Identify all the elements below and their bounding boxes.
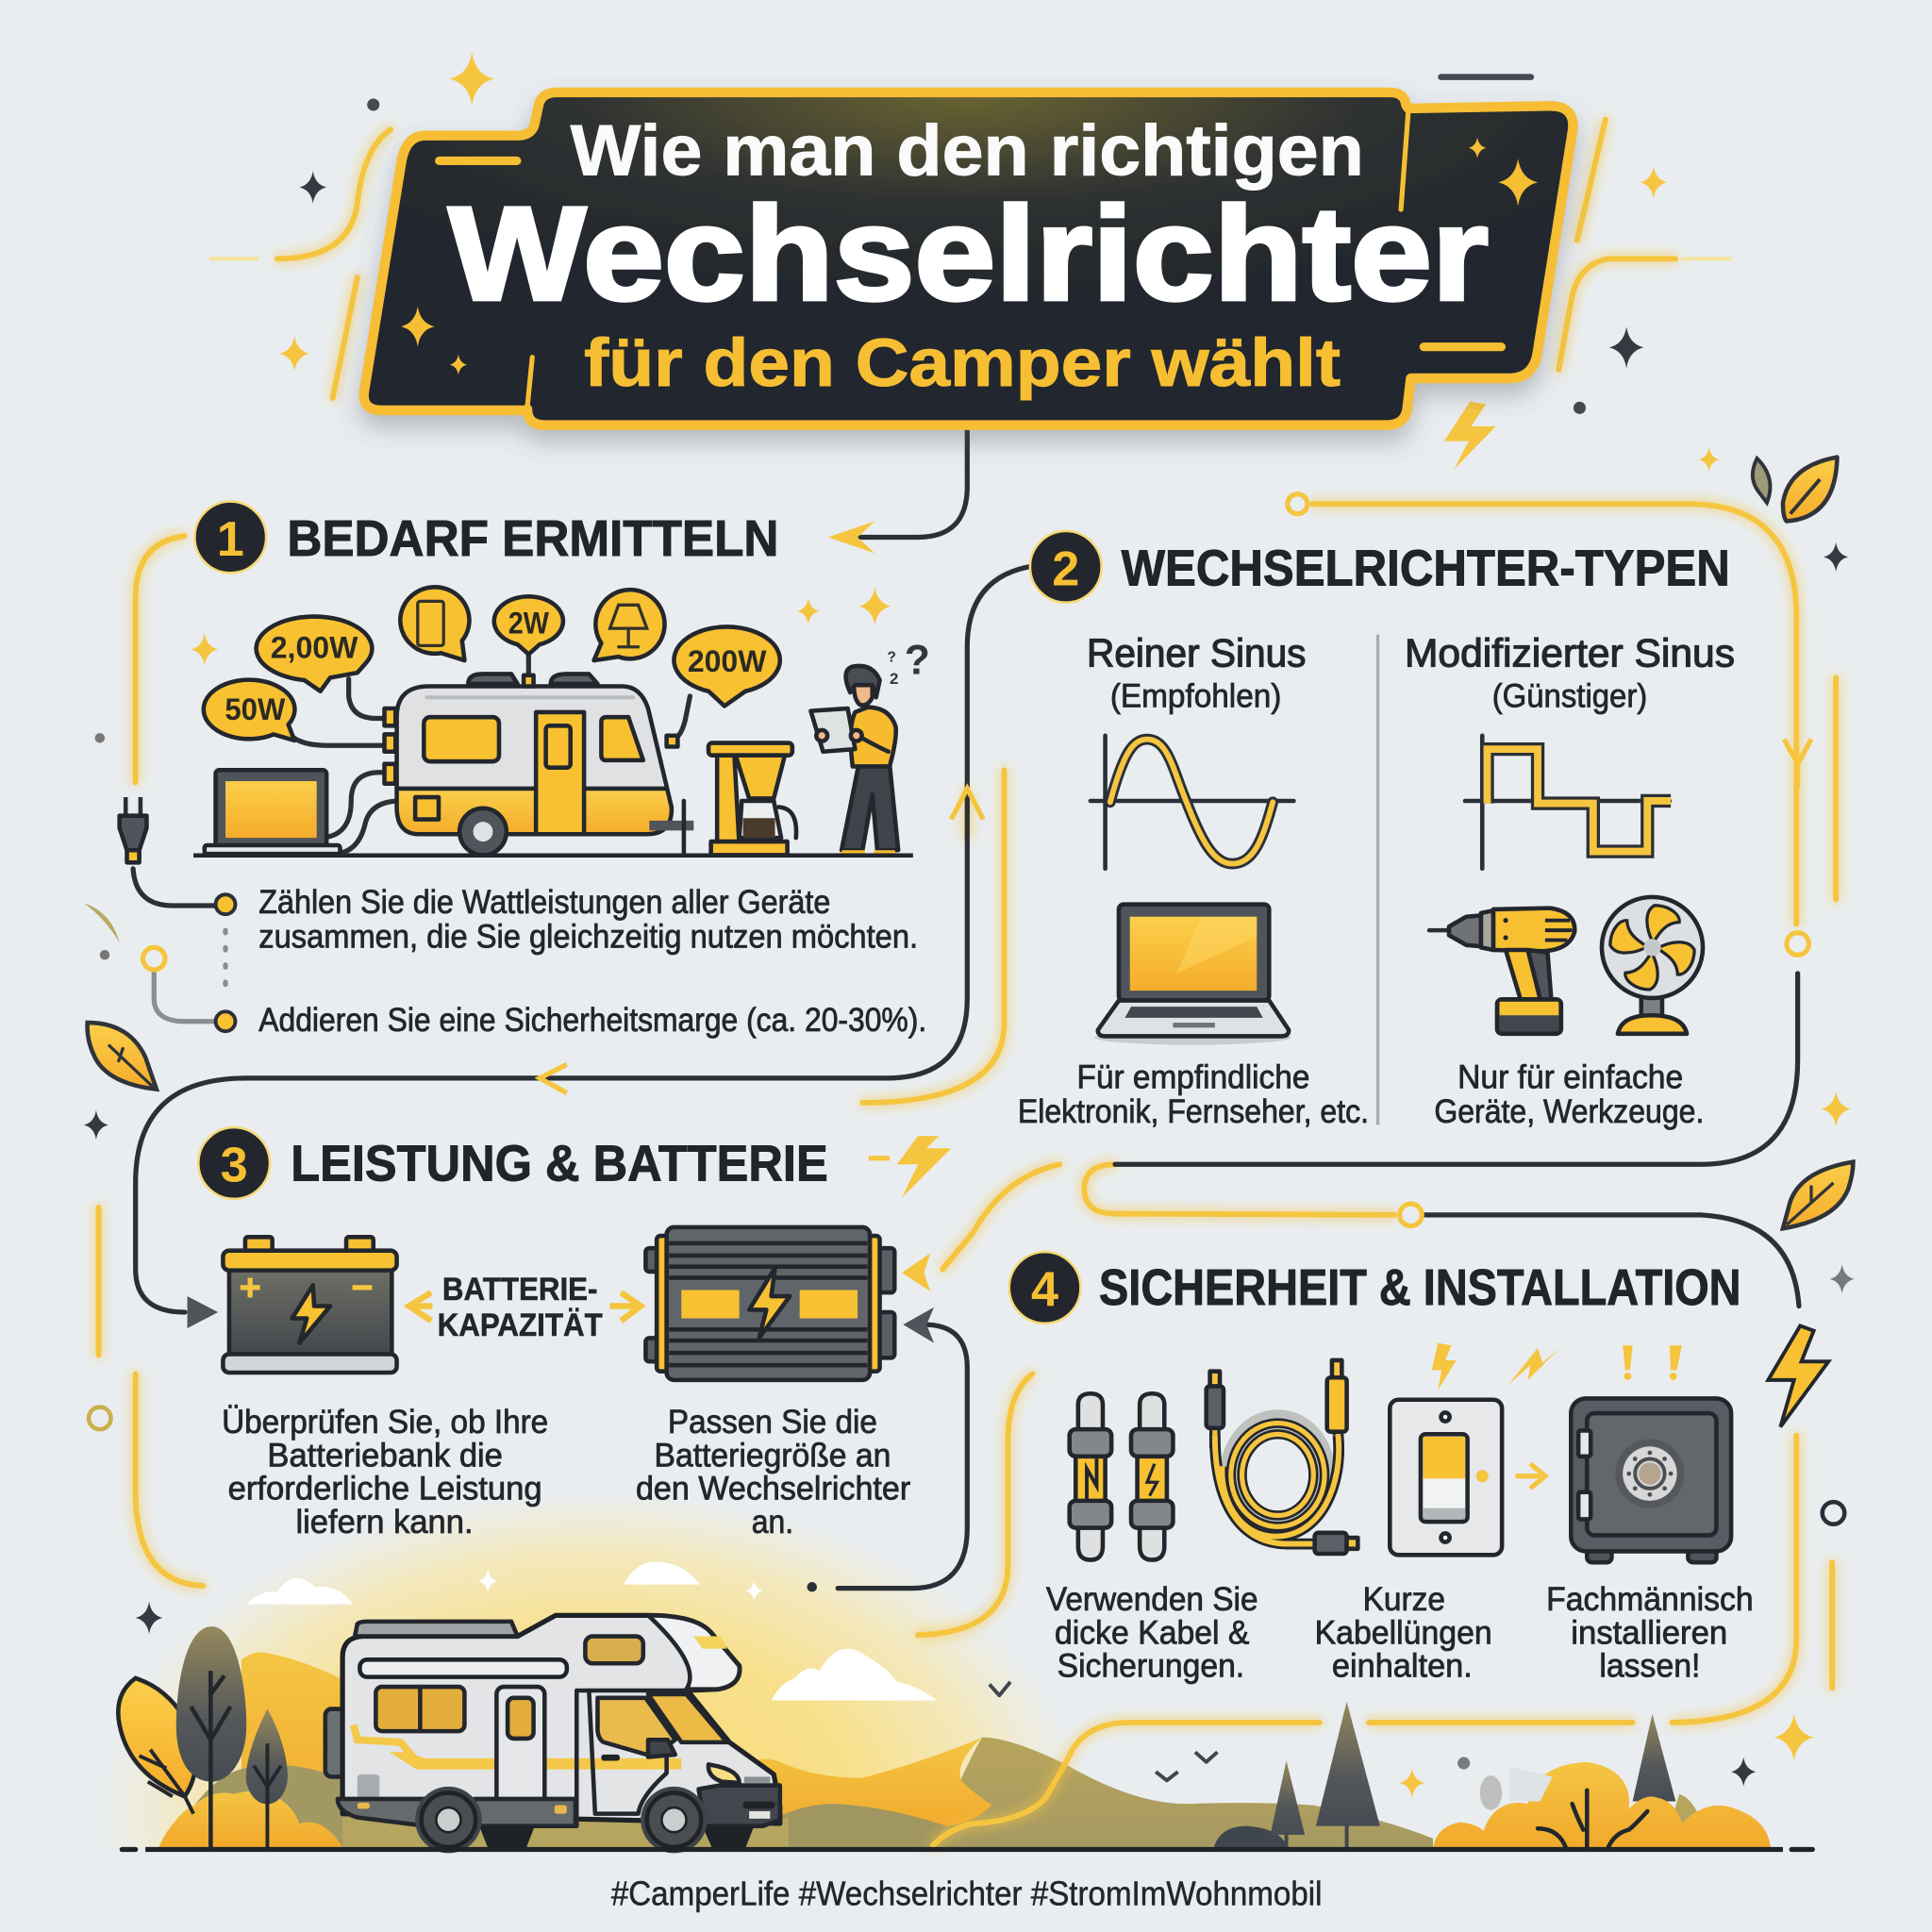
speech bubbles: 200W [688,643,767,678]
ground line [193,853,913,858]
number badge 2 [1030,531,1102,603]
text: battery check: Batteriebank die [267,1437,503,1474]
heading 1: BEDARF ERMITTELN [287,511,778,567]
ground line [120,1847,1815,1852]
text: short cables: Kurze [1363,1581,1445,1618]
caravan [385,674,693,855]
icon: laptop [1094,905,1291,1045]
number badge 2: 2 [1052,541,1079,596]
icon: fan [1602,897,1703,1034]
column: modified sine: Modifizierter Sinus [1405,631,1735,675]
text: battery check: liefern kann. [295,1504,474,1541]
icon: lightning bolts [869,402,1828,1426]
column: pure sine: Elektronik, Fernseher, etc. [1018,1093,1369,1130]
label: battery capacity [409,1272,641,1343]
column: modified sine: (Günstiger) [1492,678,1647,715]
column: pure sine [1018,631,1369,1130]
title banner [364,92,1573,425]
trees left [118,1626,288,1848]
icon: cable [1207,1360,1357,1554]
text: cables and fuses: Verwenden Sie [1046,1581,1258,1618]
motorhome [325,1615,780,1853]
text: professional install [1546,1581,1754,1685]
number badge 4: 4 [1031,1262,1058,1317]
title line 3: für den Camper wählt [584,325,1341,401]
bullet 2: Addieren Sie eine Sicherheitsmarge (ca. 20-30%). [258,1002,926,1039]
label: battery capacity: KAPAZITÄT [438,1307,603,1343]
column: modified sine [1405,631,1735,1130]
text: match battery: Batteriegröße an [655,1437,891,1474]
birds [990,1682,1217,1780]
icon: plug [120,797,146,862]
illustration: caravan and devices [193,587,930,858]
icon: safe [1571,1398,1731,1562]
number badge 3: 3 [221,1139,248,1193]
number badge 1 [194,502,266,573]
landscape backdrop: sky, clouds and hills [25,1478,1433,1848]
person with tablet [810,637,930,855]
connector lines dark [133,429,1799,1589]
text: cables and fuses [1046,1581,1258,1685]
text: cables and fuses: Sicherungen. [1058,1648,1244,1685]
arrow [1516,1464,1545,1489]
label: battery capacity: BATTERIE- [442,1272,597,1307]
text: professional install: Fachmännisch [1546,1581,1754,1618]
text: match battery [636,1404,910,1541]
number badge 3 [198,1127,270,1199]
heading 4: SICHERHEIT & INSTALLATION [1099,1260,1741,1316]
laptop small [205,770,340,854]
person with tablet: ? [887,649,896,665]
panel: section 4 [1009,1252,1754,1685]
hashtags: #CamperLife #Wechselrichter #StromImWohnmobil [611,1874,1322,1912]
icon: battery [223,1237,397,1373]
icon: leaves [88,458,1853,1228]
speech bubbles: 2,00W [271,629,358,664]
number badge 1: 1 [217,512,244,567]
text: cables and fuses: dicke Kabel & [1055,1614,1249,1651]
speech bubbles [204,587,780,741]
column: pure sine: (Empfohlen) [1110,678,1281,715]
number badge 4 [1009,1252,1080,1324]
icon: fuses [1070,1393,1173,1560]
text: battery check: Überprüfen Sie, ob Ihre [222,1404,548,1441]
panel: section 1 [120,502,930,1039]
chart: sine wave [1091,736,1293,869]
text: battery check: erforderliche Leistung [228,1471,542,1507]
title line 1: Wie man den richtigen [571,110,1364,191]
trees and bushes right [1214,1702,1771,1848]
column: pure sine: Für empfindliche [1077,1058,1309,1095]
text: short cables [1315,1581,1492,1685]
text: match battery: den Wechselrichter [636,1471,910,1507]
icon: inverter [645,1227,894,1380]
landscape foreground [118,1615,1815,1853]
person with tablet: ? [905,637,930,683]
icon: wall switch [1390,1400,1502,1555]
title decorations [401,111,1538,407]
cables [291,651,690,854]
text: professional install: lassen! [1599,1648,1700,1685]
text: short cables: Kabellüngen [1315,1614,1492,1651]
text: battery check [222,1404,548,1541]
panel: section 3 [198,1127,910,1541]
text: short cables: einhalten. [1332,1648,1473,1685]
person with tablet: 2 [890,670,898,688]
heading 3: LEISTUNG & BATTERIE [291,1136,828,1191]
speech bubbles: 2W [508,605,549,640]
column: pure sine: Reiner Sinus [1087,631,1306,675]
connector arrows and rings [89,494,1844,1592]
bullet 1: zusammen, die Sie gleichzeitig nutzen möchten. [258,918,918,955]
text: professional install: installieren [1571,1614,1727,1651]
panel: section 2 [1018,531,1735,1130]
text: match battery: an. [752,1504,793,1541]
icon: warning marks and bolts [1432,1343,1682,1390]
column divider [1376,635,1379,1124]
bullet 1 [216,884,918,955]
speech bubbles: 50W [225,691,286,726]
chart: modified wave [1465,736,1671,869]
bullet 1: Zählen Sie die Wattleistungen aller Geräte [258,884,830,921]
column: modified sine: Nur für einfache [1457,1058,1683,1095]
text: match battery: Passen Sie die [668,1404,877,1441]
heading 2: WECHSELRICHTER-TYPEN [1122,541,1730,596]
title line 2: Wechselrichter [448,178,1489,327]
icon: drill [1429,908,1574,1034]
coffee maker [708,743,796,855]
column: modified sine: Geräte, Werkzeuge. [1434,1093,1704,1130]
